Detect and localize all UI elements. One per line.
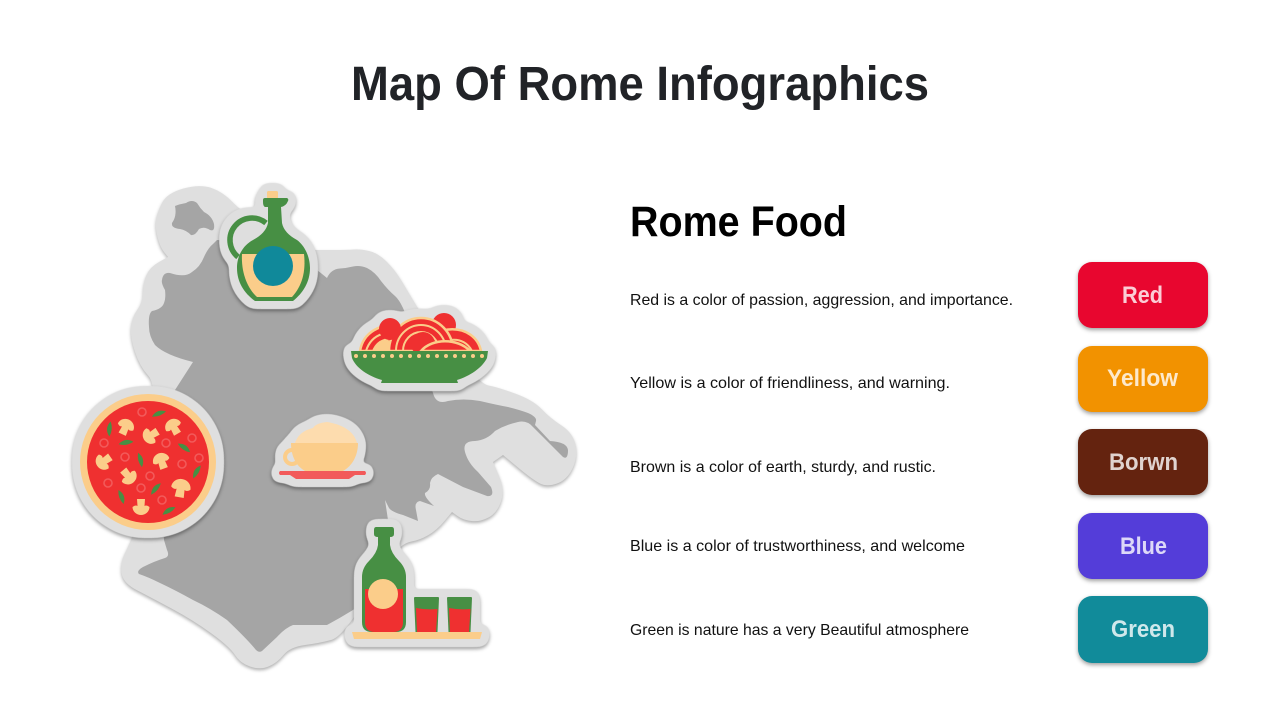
back meatball <box>432 313 456 337</box>
title: Map Of Rome Infographics <box>351 58 929 111</box>
heading: Rome Food: Rome Food <box>630 198 847 246</box>
text: brown description: Brown is a color of earth, sturdy, and rustic. <box>630 459 936 476</box>
right pasta <box>422 329 481 351</box>
button: red: Red <box>1122 282 1163 309</box>
text: yellow description: Yellow is a color of friendliness, and warning. <box>630 375 950 392</box>
pizza leaves <box>106 409 202 516</box>
pizza mushrooms <box>92 416 192 515</box>
map outer halo <box>121 186 576 668</box>
centre meatball <box>411 332 435 356</box>
big pasta arch <box>389 318 453 351</box>
icon: oil bottle <box>230 191 310 301</box>
button: blue <box>1078 513 1208 579</box>
map land <box>138 240 568 652</box>
button: blue: Blue <box>1120 533 1167 560</box>
text: red description: Red is a color of passion, aggression, and importance. <box>630 292 1013 309</box>
icon: wine bottle and glasses <box>352 527 482 639</box>
icon: pizza <box>80 394 216 530</box>
front pasta <box>421 341 470 351</box>
button: red <box>1078 262 1208 328</box>
icon: soup cup <box>279 422 366 479</box>
button: brown <box>1078 429 1208 495</box>
button: yellow <box>1078 346 1208 412</box>
button: brown: Borwn <box>1109 449 1178 476</box>
text: green description: Green is nature has a very Beautiful atmosphere <box>630 622 969 639</box>
map of Rome <box>121 186 576 668</box>
button: yellow: Yellow <box>1107 365 1178 392</box>
text: blue description: Blue is a color of trustworthiness, and welcome <box>630 538 965 555</box>
map island <box>172 201 214 235</box>
button: green: Green <box>1111 616 1175 643</box>
bowl <box>351 351 488 383</box>
pizza rings <box>100 408 203 504</box>
button: green <box>1078 596 1208 663</box>
left pasta <box>360 325 402 351</box>
icon: spaghetti bowl <box>351 313 488 383</box>
left meatball <box>379 318 401 340</box>
